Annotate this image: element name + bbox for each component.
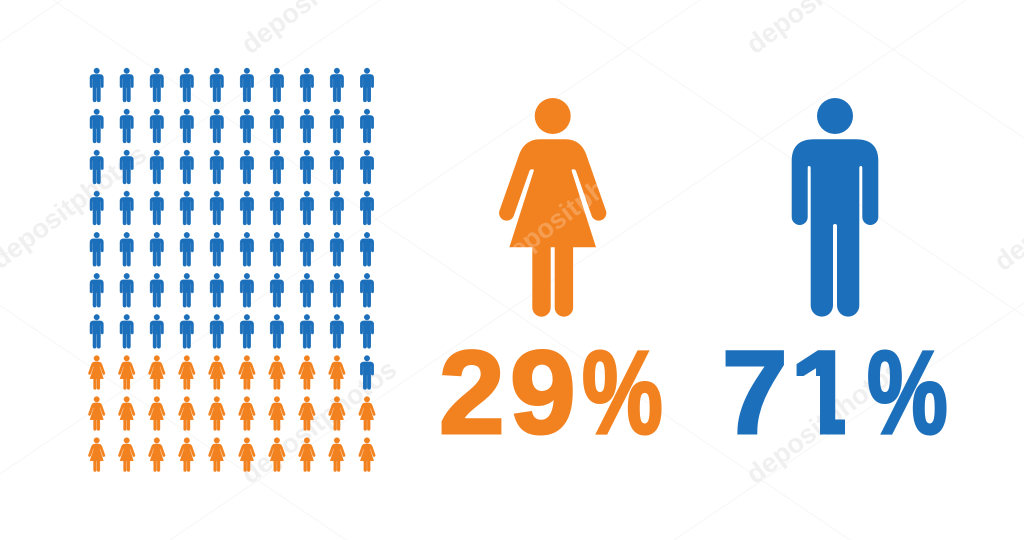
row 2: ten men [90,109,374,143]
row 4: ten men [90,191,374,225]
row 8: nine women and one man [88,356,374,390]
row 9: ten women [88,396,375,431]
women percentage: 9 [510,327,576,459]
row 3: ten men [90,150,374,184]
men percentage: % [867,328,948,459]
stock photo watermarks: depositphotos [741,354,907,490]
row 7: ten men [90,314,374,348]
icon: large man [792,98,878,317]
women percentage: % [582,328,663,459]
row 5: ten men [90,232,374,266]
row 1: ten men [90,68,374,102]
pictogram grid: 71 men and 29 women [88,68,375,472]
men percentage: 1 [790,327,856,459]
women percentage: 2 [439,327,505,459]
icon: large woman [499,98,606,317]
row 6: ten men [90,273,374,307]
women percentage [439,327,663,459]
stock photo watermarks: depositphotos [236,354,402,490]
watermark over the woman icon: depositphotos [491,139,657,275]
row 10: ten women [88,438,375,472]
men percentage: 7 [722,327,788,459]
men percentage [726,350,947,436]
